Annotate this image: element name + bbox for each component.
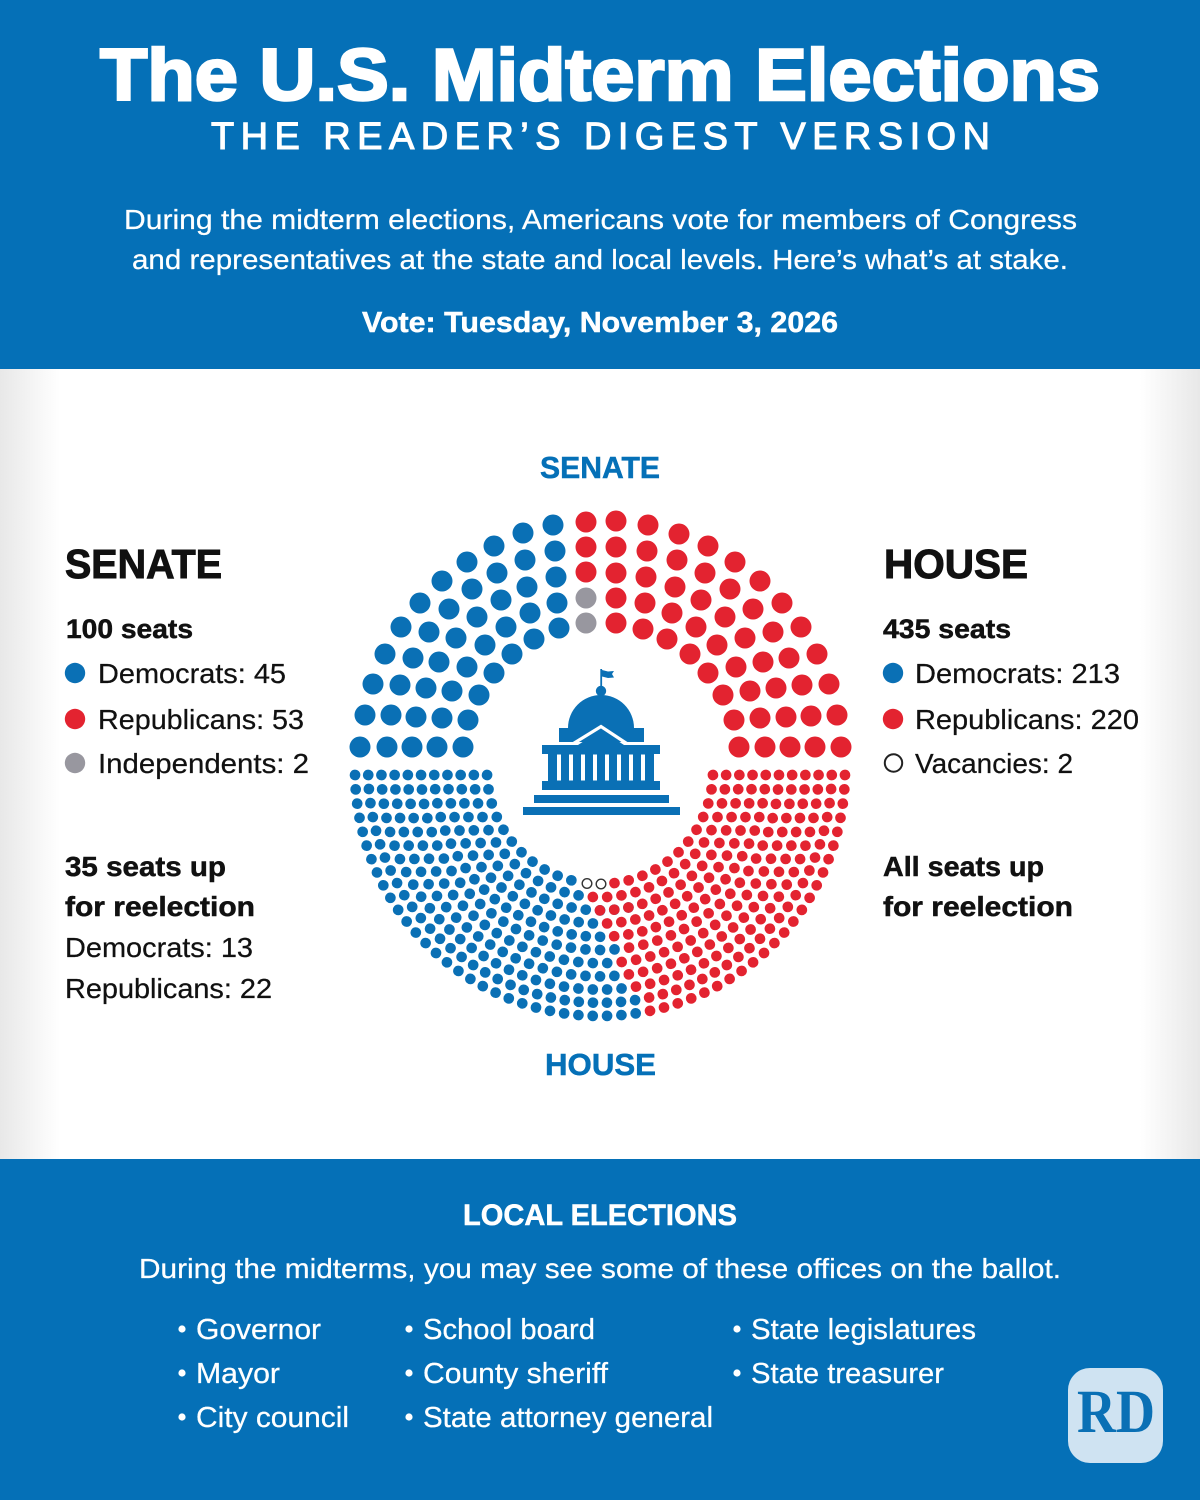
office list column 3: State treasurer [751, 1358, 945, 1390]
house reelection text [883, 851, 1073, 922]
title: The U.S. Midterm Elections [100, 35, 1100, 116]
chart label: house: HOUSE [545, 1047, 656, 1082]
legend: senate democrats: Democrats: 45 [98, 658, 286, 689]
local elections heading: LOCAL ELECTIONS [463, 1199, 737, 1232]
house vacancies dots [582, 879, 606, 889]
intro text: and representatives at the state and local levels. Here’s what’s at stake. [132, 244, 1068, 275]
house reelection text: for reelection [883, 891, 1073, 922]
middle panel [0, 369, 1200, 1159]
house democrats dots [351, 522, 849, 1020]
logo: RD [1068, 1368, 1163, 1463]
house republicans dots [351, 522, 849, 1020]
house stats column [883, 541, 1139, 922]
office list column 1: City council [196, 1402, 349, 1434]
office list column 2: School board [423, 1314, 595, 1346]
senate reelection text: Republicans: 22 [65, 973, 272, 1004]
vote date: Vote: Tuesday, November 3, 2026 [362, 307, 838, 339]
senate reelection text [65, 851, 272, 1004]
house heading: HOUSE [884, 541, 1028, 587]
icon: capitol building [523, 669, 680, 815]
intro text [124, 204, 1077, 275]
senate seat chart [350, 510, 852, 758]
senate reelection text: for reelection [65, 891, 255, 922]
footer panel: local elections [0, 1159, 1200, 1500]
chart label: senate: SENATE [540, 450, 660, 485]
legend: house vacancies: Vacancies: 2 [915, 748, 1073, 779]
subtitle: THE READER’S DIGEST VERSION [211, 116, 990, 158]
legend: house republicans: Republicans: 220 [915, 704, 1139, 735]
office list column 2 [405, 1314, 713, 1434]
senate reelection text: 35 seats up [65, 851, 226, 882]
logo: RD: RD [1077, 1379, 1155, 1446]
header panel [0, 0, 1200, 369]
house seats total: 435 seats [883, 614, 1011, 644]
legend: house democrats: Democrats: 213 [915, 658, 1120, 689]
house reelection text: All seats up [883, 851, 1044, 882]
legend: senate independents: Independents: 2 [98, 748, 309, 779]
senate republicans dots [576, 510, 852, 758]
senate seats total: 100 seats [66, 614, 193, 644]
office list column 2: State attorney general [423, 1402, 713, 1434]
senate heading: SENATE [65, 541, 222, 587]
office list column 1: Governor [196, 1314, 322, 1346]
senate independents dots [576, 588, 596, 634]
legend: senate republicans: Republicans: 53 [98, 704, 304, 735]
office list column 3: State legislatures [751, 1314, 976, 1346]
local elections intro: During the midterms, you may see some of these offices on the ballot. [139, 1253, 1061, 1284]
senate reelection text: Democrats: 13 [65, 932, 253, 963]
office list column 3 [733, 1314, 976, 1390]
office list column 2: County sheriff [423, 1358, 608, 1390]
office list column 1 [178, 1314, 349, 1434]
house seat chart [351, 522, 849, 1020]
office list column 1: Mayor [196, 1358, 281, 1390]
intro text: During the midterm elections, Americans vote for members of Congress [124, 204, 1077, 235]
senate democrats dots [350, 514, 570, 758]
senate stats column [65, 541, 309, 1004]
